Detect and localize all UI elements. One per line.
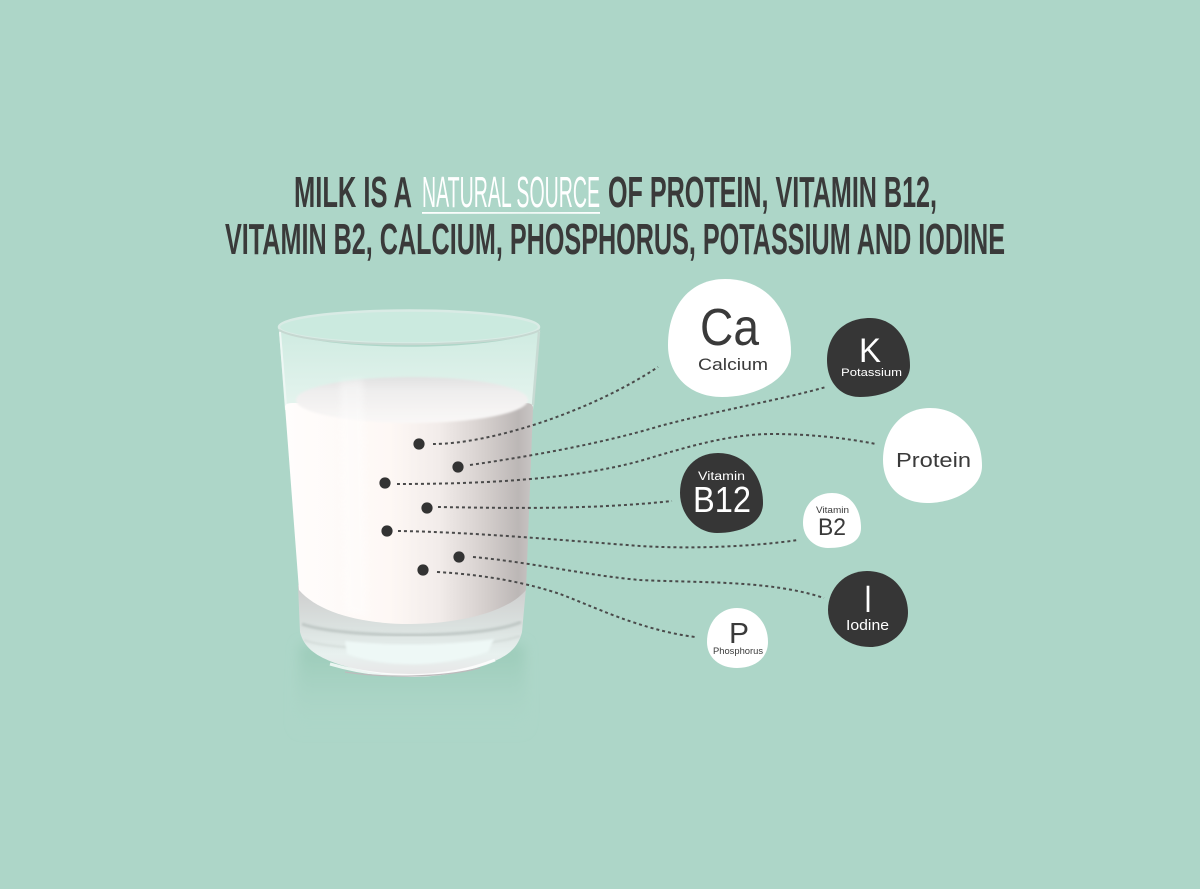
badge: protein [883, 408, 982, 503]
badge: calcium: Calcium [698, 355, 768, 374]
line to phosphorus [437, 572, 695, 637]
title: OF PROTEIN, VITAMIN B12, [608, 168, 937, 217]
badge: vitamin B12: B12 [693, 479, 751, 520]
glass of milk [279, 310, 540, 738]
badge: protein: Protein [896, 450, 971, 472]
line to potassium [470, 387, 826, 465]
title: NATURAL SOURCE [422, 168, 600, 217]
line to vitamin B12 [438, 501, 672, 508]
highlight [340, 379, 368, 618]
title [225, 168, 1005, 264]
badge: potassium [827, 318, 910, 397]
badge: vitamin B2: B2 [818, 514, 846, 541]
glass upper wall [279, 331, 540, 410]
title: MILK IS A [294, 168, 412, 217]
milk dots [379, 438, 465, 576]
badge: calcium [668, 279, 791, 397]
glass rim [279, 310, 540, 405]
badge: vitamin B2: Vitamin [816, 505, 849, 515]
line to vitamin B2 [398, 531, 798, 547]
badge: phosphorus: Phosphorus [713, 646, 763, 657]
milk body [285, 403, 533, 624]
badge: iodine: I [864, 579, 872, 621]
badge: iodine: Iodine [846, 618, 889, 634]
badge: vitamin B12: Vitamin [698, 471, 745, 483]
dotted connector lines [397, 367, 876, 637]
badge: potassium: K [859, 332, 881, 370]
line to protein [397, 434, 876, 484]
badge: iodine [828, 571, 908, 647]
glass reflection [294, 645, 528, 738]
badge: vitamin B12 [680, 453, 763, 533]
milk surface [296, 377, 528, 423]
badge: vitamin B2 [803, 493, 861, 548]
badge: phosphorus: P [729, 618, 749, 650]
line to calcium [433, 367, 658, 444]
badge: potassium: Potassium [841, 367, 902, 379]
badge: phosphorus [707, 608, 768, 668]
glass base [298, 585, 526, 676]
line to iodine [473, 557, 824, 598]
badge: calcium: Ca [700, 299, 759, 357]
